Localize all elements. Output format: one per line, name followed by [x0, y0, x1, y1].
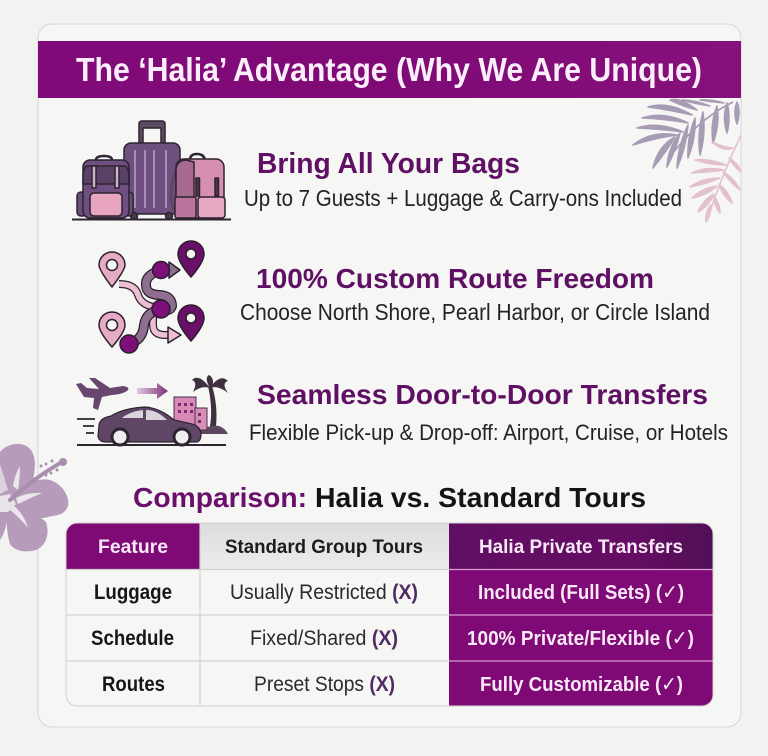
- palm tree: [192, 375, 228, 434]
- title: The ‘Halia’ Advantage (Why We Are Unique): [76, 51, 702, 88]
- purple backpack: [77, 156, 133, 218]
- row: schedule: Fixed/Shared (X): [250, 627, 398, 650]
- header banner: [38, 41, 741, 98]
- suitcase: [124, 121, 180, 220]
- heading: seamless transfers: Seamless Door-to-Door Transfers: [257, 379, 708, 410]
- airplane: [76, 378, 128, 410]
- road: [77, 444, 226, 446]
- pin pink top: [99, 252, 125, 287]
- decoration: hibiscus flower: [0, 444, 68, 551]
- pale route arrow upper: [119, 284, 161, 308]
- header: halia private transfers: Halia Private Transfers: [479, 536, 683, 558]
- gradient arrow: [137, 383, 168, 399]
- route nodes: [152, 262, 170, 278]
- header: standard group tours: Standard Group Tours: [225, 536, 423, 558]
- text: transfers description: Flexible Pick-up & Drop-off: Airport, Cruise, or Hotels: [249, 420, 728, 445]
- icon: door to door transfer: [76, 375, 228, 445]
- heading: comparison: Halia vs. Standard Tours: [315, 482, 646, 513]
- comparison table: [66, 523, 713, 706]
- row: luggage: Included (Full Sets) (✓): [478, 581, 684, 604]
- speed lines: [77, 419, 95, 433]
- icon: route map: [99, 241, 204, 353]
- pin dark top: [178, 241, 204, 277]
- pale route arrow lower: [153, 312, 176, 335]
- heading: custom route freedom: 100% Custom Route Freedom: [256, 263, 654, 294]
- row: routes: Fully Customizable (✓): [480, 673, 683, 696]
- decoration: palm leaves: [633, 99, 741, 222]
- dark s-route: [129, 270, 172, 344]
- header: feature: Feature: [98, 536, 168, 558]
- ground line: [72, 218, 231, 220]
- row: routes: Preset Stops (X): [254, 673, 395, 696]
- text: bags description: Up to 7 Guests + Luggage & Carry-ons Included: [244, 185, 682, 211]
- row: luggage: Luggage: [94, 581, 172, 604]
- row: schedule: [91, 627, 694, 650]
- row: luggage: [94, 581, 684, 604]
- car: [98, 407, 201, 445]
- heading: comparison: Comparison:: [133, 482, 307, 513]
- row: schedule: Schedule: [91, 627, 174, 650]
- row: luggage: Usually Restricted (X): [230, 581, 418, 604]
- pin pink bottom: [99, 312, 125, 347]
- row: schedule: 100% Private/Flexible (✓): [467, 627, 694, 650]
- pin dark bottom: [178, 305, 204, 341]
- icon: luggage: [72, 121, 231, 220]
- row: routes: [102, 673, 683, 696]
- hotel buildings: [174, 397, 207, 431]
- row: routes: Routes: [102, 673, 165, 696]
- heading: comparison: [133, 482, 646, 513]
- stamen: [10, 462, 62, 500]
- pink backpack: [171, 154, 225, 218]
- text: route description: Choose North Shore, Pearl Harbor, or Circle Island: [240, 299, 710, 325]
- heading: bring all your bags: Bring All Your Bags: [257, 148, 520, 180]
